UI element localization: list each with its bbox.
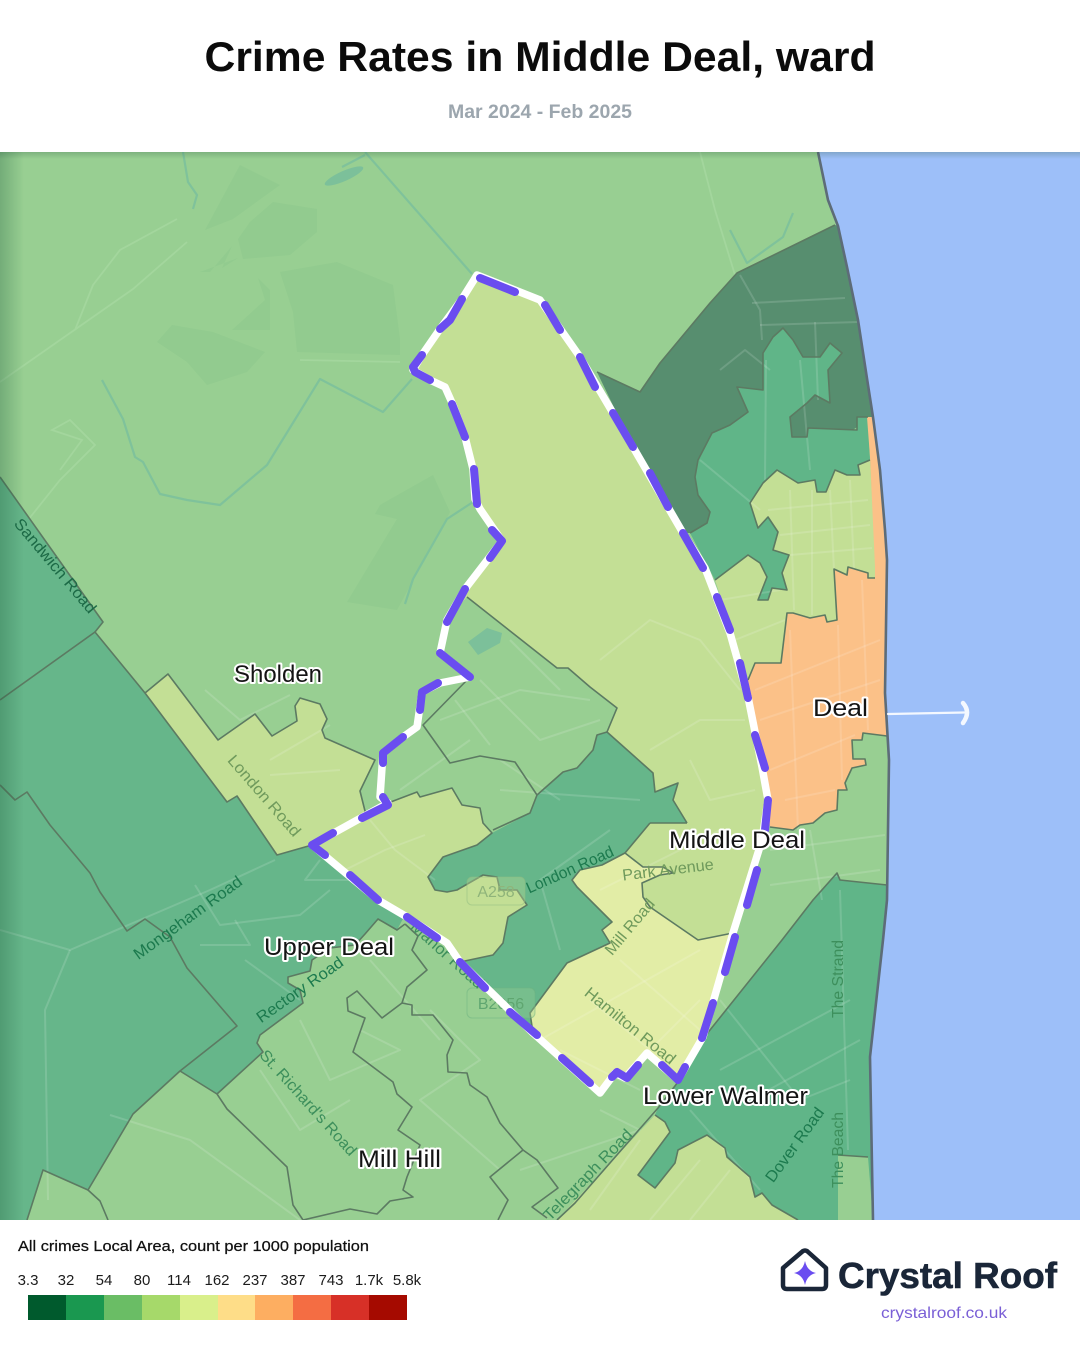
legend tick labels: 32 xyxy=(58,1272,74,1289)
road shield: B2056: B2056 xyxy=(478,996,524,1013)
legend tick labels: 743 xyxy=(318,1272,344,1289)
legend tick labels: 54 xyxy=(96,1272,112,1289)
white boundary line xyxy=(312,275,768,1093)
ward interior: west light green xyxy=(463,598,466,602)
sea xyxy=(818,152,1080,1220)
pier xyxy=(888,703,967,723)
region: Deal north yellow-green xyxy=(715,460,876,680)
place labels: Lower Walmer xyxy=(643,1083,808,1110)
title: Crime Rates in Middle Deal, ward xyxy=(204,33,876,80)
road labels: London Road xyxy=(524,844,617,897)
road labels xyxy=(10,516,847,1224)
place labels xyxy=(234,661,868,1173)
road labels: London Road xyxy=(224,752,303,840)
road labels: Manor Road xyxy=(407,918,487,992)
region: north-east mid green xyxy=(690,328,870,600)
road labels: Park Avenue xyxy=(621,856,715,885)
region: south-east dark green xyxy=(638,873,887,1220)
legend tick labels: 114 xyxy=(167,1272,191,1289)
brand logo xyxy=(783,1250,1058,1322)
choropleth map xyxy=(0,152,1080,1224)
road shield: A258 xyxy=(467,877,525,905)
place labels: Sholden xyxy=(234,661,322,688)
road labels: The Beach xyxy=(830,1112,847,1188)
legend colour scale xyxy=(28,1295,407,1320)
road labels: Mill Road xyxy=(602,896,659,959)
region: south yellow-green xyxy=(557,1115,798,1220)
road labels: Dover Road xyxy=(763,1105,828,1186)
woodland patches xyxy=(157,165,450,610)
ward interior: north yellow-green xyxy=(413,275,768,940)
legend xyxy=(18,1238,422,1320)
legend tick labels: 387 xyxy=(280,1272,306,1289)
legend tick labels xyxy=(18,1272,422,1289)
purple dashes xyxy=(312,278,768,1083)
map base: light green area xyxy=(0,152,888,1220)
street network xyxy=(0,275,885,1220)
coastline xyxy=(818,152,889,1220)
legend tick labels: 162 xyxy=(204,1272,230,1289)
rivers and drains xyxy=(102,152,793,604)
legend tick labels: 80 xyxy=(134,1272,150,1289)
legend title: All crimes Local Area, count per 1000 population xyxy=(18,1238,369,1255)
place labels: Mill Hill xyxy=(358,1146,441,1173)
region: west dark green wards xyxy=(0,477,405,1220)
road labels: Telegraph Road xyxy=(541,1126,636,1224)
brand name: Crystal Roof xyxy=(838,1255,1058,1296)
place labels: Upper Deal xyxy=(264,934,394,961)
lake xyxy=(324,166,364,186)
faint rural roads xyxy=(0,152,735,520)
pond xyxy=(468,628,502,655)
road labels: Hamilton Road xyxy=(581,985,679,1068)
place labels: Deal xyxy=(813,695,868,722)
road shield: B2056 xyxy=(467,988,535,1018)
ward interior: south-west yellow-green xyxy=(312,788,527,962)
legend tick labels: 5.8k xyxy=(393,1272,422,1289)
ward interior: central dark green xyxy=(428,732,687,1033)
region: north-east darkest ward xyxy=(597,225,873,533)
vignette xyxy=(0,152,19,1220)
road shield: A258: A258 xyxy=(477,884,515,901)
legend tick labels: 1.7k xyxy=(355,1272,384,1289)
ward boundary: Middle Deal xyxy=(312,275,768,1093)
brand url: crystalroof.co.uk xyxy=(881,1305,1008,1322)
place labels: Middle Deal xyxy=(669,827,805,854)
legend tick labels: 237 xyxy=(242,1272,268,1289)
subtitle: date range: Mar 2024 - Feb 2025 xyxy=(448,102,632,123)
road labels: Mongeham Road xyxy=(131,873,246,963)
icon: house with star xyxy=(783,1250,826,1289)
road labels: St. Richard's Road xyxy=(256,1047,359,1160)
ward interior: south pale yellow xyxy=(530,853,733,1093)
region: The Beach light block xyxy=(838,1155,873,1220)
road labels: Rectory Road xyxy=(254,954,347,1027)
region: Deal town orange xyxy=(748,417,887,830)
region: Sholden London Road xyxy=(145,674,375,855)
road labels: The Strand xyxy=(830,940,847,1018)
ward and neighbourhood boundaries xyxy=(0,225,887,1220)
legend tick labels: 3.3 xyxy=(18,1272,38,1289)
road labels: Sandwich Road xyxy=(10,516,99,617)
